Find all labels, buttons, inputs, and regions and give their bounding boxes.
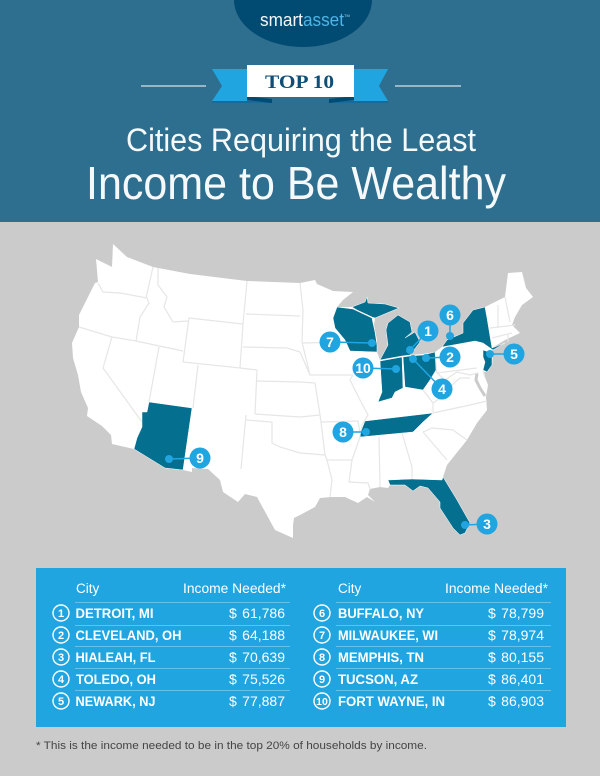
title line 2: Income to Be Wealthy xyxy=(86,157,506,209)
row 6 xyxy=(314,605,544,621)
marker 2 xyxy=(422,346,460,368)
row 4 xyxy=(53,671,285,687)
header panel xyxy=(0,0,600,222)
table headers: City xyxy=(338,581,361,596)
highlighted states xyxy=(134,297,505,535)
row 10: FORT WAYNE, IN xyxy=(338,693,445,709)
marker 7 xyxy=(320,332,376,352)
marker 3 xyxy=(461,514,498,534)
state: Florida xyxy=(388,477,470,535)
ribbon: top 10: TOP 10 xyxy=(265,72,334,93)
US map xyxy=(72,244,533,538)
row 8: $ xyxy=(488,649,496,665)
state: New York xyxy=(442,307,505,350)
marker 6 xyxy=(440,304,460,340)
table headers: Income Needed* xyxy=(445,581,549,596)
marker 2: 2 xyxy=(446,349,454,365)
row 4: TOLEDO, OH xyxy=(76,671,156,687)
row 8: MEMPHIS, TN xyxy=(338,649,424,665)
row 6: BUFFALO, NY xyxy=(338,605,425,621)
table headers: City xyxy=(76,581,99,596)
marker 4 xyxy=(409,355,452,400)
row 7: MILWAUKEE, WI xyxy=(338,627,438,643)
marker 9 xyxy=(165,448,210,468)
marker 6: 6 xyxy=(446,307,454,323)
row 4: 75,526 xyxy=(242,671,285,687)
row 4: $ xyxy=(229,671,237,687)
row 8: 80,155 xyxy=(501,649,544,665)
marker 8: 8 xyxy=(339,424,347,440)
marker 10 xyxy=(352,358,400,378)
table headers: Income Needed* xyxy=(183,581,287,596)
row 8: 8 xyxy=(319,652,325,664)
row 9: TUCSON, AZ xyxy=(338,671,418,687)
marker 10: 10 xyxy=(355,360,371,376)
row 5: NEWARK, NJ xyxy=(76,693,156,709)
state: Wisconsin xyxy=(333,307,377,352)
marker 8 xyxy=(332,422,370,442)
state: New Jersey xyxy=(483,350,492,372)
marker 4: 4 xyxy=(438,381,446,397)
Chesapeake Bay xyxy=(476,373,485,396)
row 10 xyxy=(314,693,544,709)
marker 7: 7 xyxy=(326,334,334,350)
row 3: $ xyxy=(229,649,237,665)
logo: smartasset xyxy=(260,9,344,30)
row 2 xyxy=(53,627,285,643)
row 5: 5 xyxy=(58,696,64,708)
state: Ohio xyxy=(403,352,436,390)
row 6: 6 xyxy=(319,608,325,620)
row 8 xyxy=(314,649,544,665)
row 5 xyxy=(53,693,285,709)
panel: ranking table xyxy=(36,568,566,727)
state: Arizona xyxy=(134,402,192,470)
row 7: $ xyxy=(488,627,496,643)
row 4: 4 xyxy=(58,674,65,686)
row 9: 9 xyxy=(319,674,325,686)
marker 5 xyxy=(486,344,524,364)
row 10: 86,903 xyxy=(501,693,544,709)
row 10: 10 xyxy=(316,696,328,708)
marker 5: 5 xyxy=(510,346,518,362)
row 3: HIALEAH, FL xyxy=(76,649,156,665)
logo xyxy=(234,0,372,47)
state borders xyxy=(79,267,515,497)
row 1 xyxy=(53,605,285,621)
row 9 xyxy=(314,671,544,687)
ribbon: top 10 xyxy=(141,65,461,103)
row 3: 70,639 xyxy=(242,649,285,665)
row 10: $ xyxy=(488,693,496,709)
row 2: 2 xyxy=(58,630,64,642)
row 3 xyxy=(53,649,285,665)
row 2: 64,188 xyxy=(242,627,285,643)
marker 9: 9 xyxy=(196,450,204,466)
title line 1: Cities Requiring the Least xyxy=(126,122,476,158)
marker 3: 3 xyxy=(483,516,491,532)
state: Indiana xyxy=(378,357,403,402)
state: Michigan xyxy=(352,297,420,360)
row 6: $ xyxy=(488,605,496,621)
row 3: 3 xyxy=(58,652,64,664)
row 1: 61,786 xyxy=(242,605,285,621)
row 6: 78,799 xyxy=(501,605,544,621)
row 1: $ xyxy=(229,605,237,621)
row 5: $ xyxy=(229,693,237,709)
row 7: 7 xyxy=(319,630,325,642)
marker 1: 1 xyxy=(424,323,432,339)
row 1: 1 xyxy=(58,608,64,620)
land outline xyxy=(72,244,533,538)
table headers xyxy=(76,581,549,596)
logo: TM xyxy=(344,13,350,18)
state: Tennessee xyxy=(360,413,433,437)
row 7 xyxy=(314,627,544,643)
marker 1 xyxy=(406,320,438,354)
row 2: $ xyxy=(229,627,237,643)
row 5: 77,887 xyxy=(242,693,285,709)
row 9: $ xyxy=(488,671,496,687)
row 2: CLEVELAND, OH xyxy=(76,627,182,643)
row 7: 78,974 xyxy=(501,627,544,643)
row 1: DETROIT, MI xyxy=(76,605,154,621)
row 9: 86,401 xyxy=(501,671,544,687)
footnote: * This is the income needed to be in the top 20% of households by income. xyxy=(36,740,427,752)
